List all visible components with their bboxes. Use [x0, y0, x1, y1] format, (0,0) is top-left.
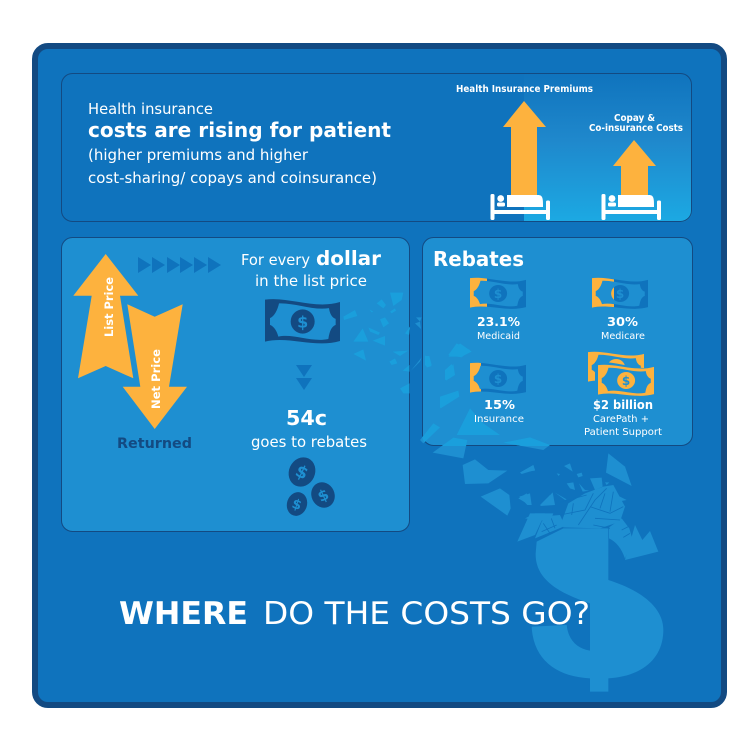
icon: bed 2	[602, 194, 661, 220]
arrow: list price: List Price	[102, 277, 116, 337]
text: goes to rebates: goes to rebates	[251, 433, 367, 451]
item: medicaid	[470, 278, 526, 342]
heading text: (higher premiums and higher	[88, 146, 309, 164]
item: carepath: $2 billion	[593, 397, 653, 412]
text: for every dollar	[241, 247, 381, 290]
shards over background	[343, 293, 632, 542]
item: insurance: $	[494, 372, 502, 386]
item: medicare: $	[616, 287, 624, 301]
label: copay: Co-insurance Costs	[589, 123, 683, 134]
title: DO THE COSTS GO?	[263, 596, 590, 632]
icon: bed 1	[490, 194, 550, 220]
heading text: costs are rising for patient	[88, 118, 391, 142]
item: carepath	[584, 352, 662, 438]
rebates content	[433, 247, 662, 438]
label: premiums: Health Insurance Premiums	[456, 84, 593, 95]
icon: double down arrows	[296, 365, 312, 390]
panel: rising costs	[62, 73, 692, 222]
item: medicaid: Medicaid	[477, 331, 520, 342]
arrow: net price: Net Price	[149, 349, 163, 409]
item: medicaid: $	[494, 287, 502, 301]
icon: coins: $	[292, 461, 311, 484]
item: medicare: 30%	[607, 314, 638, 329]
arrow: premiums up	[503, 101, 546, 196]
item: insurance: 15%	[484, 397, 515, 412]
label: copay	[589, 113, 683, 134]
arrow: copay up	[613, 140, 656, 196]
icon: coins	[284, 453, 339, 519]
dollar tail fragments	[535, 485, 658, 560]
heading text	[88, 100, 391, 187]
arrow: net price	[123, 304, 187, 429]
item: medicare	[592, 278, 648, 342]
heading text: cost-sharing/ copays and coinsurance)	[88, 169, 377, 187]
panel: rebates	[422, 238, 692, 446]
text: for every dollar: in the list price	[255, 272, 367, 290]
arrow: list price	[73, 254, 138, 378]
label: copay: Copay &	[614, 113, 655, 124]
icon: coins: $	[315, 485, 332, 506]
item: carepath: $	[622, 374, 630, 388]
heading text: Health insurance	[88, 100, 213, 118]
item: medicare: Medicare	[601, 331, 645, 342]
dollar sign body	[532, 528, 663, 692]
item: carepath: CarePath +	[593, 414, 649, 425]
item: insurance	[470, 363, 526, 425]
item: medicaid: 23.1%	[477, 314, 520, 329]
item: insurance: Insurance	[474, 414, 524, 425]
title	[119, 596, 590, 632]
chevrons	[138, 257, 221, 273]
title: WHERE	[119, 596, 248, 632]
icon: coins: $	[290, 496, 304, 514]
text: for every dollar: For every	[241, 251, 310, 269]
shards over panels	[344, 292, 550, 446]
item: carepath: Patient Support	[584, 427, 662, 438]
icon: dollar bill	[265, 299, 340, 343]
broken dollar sign watermark	[532, 485, 663, 692]
label: returned: Returned	[117, 436, 192, 452]
text: 54c: 54c	[286, 406, 327, 430]
text: for every dollar: dollar	[316, 247, 381, 270]
icon: dollar bill: $	[297, 312, 308, 332]
heading: rebates: Rebates	[433, 247, 524, 271]
panel: list price to rebates	[62, 238, 410, 532]
